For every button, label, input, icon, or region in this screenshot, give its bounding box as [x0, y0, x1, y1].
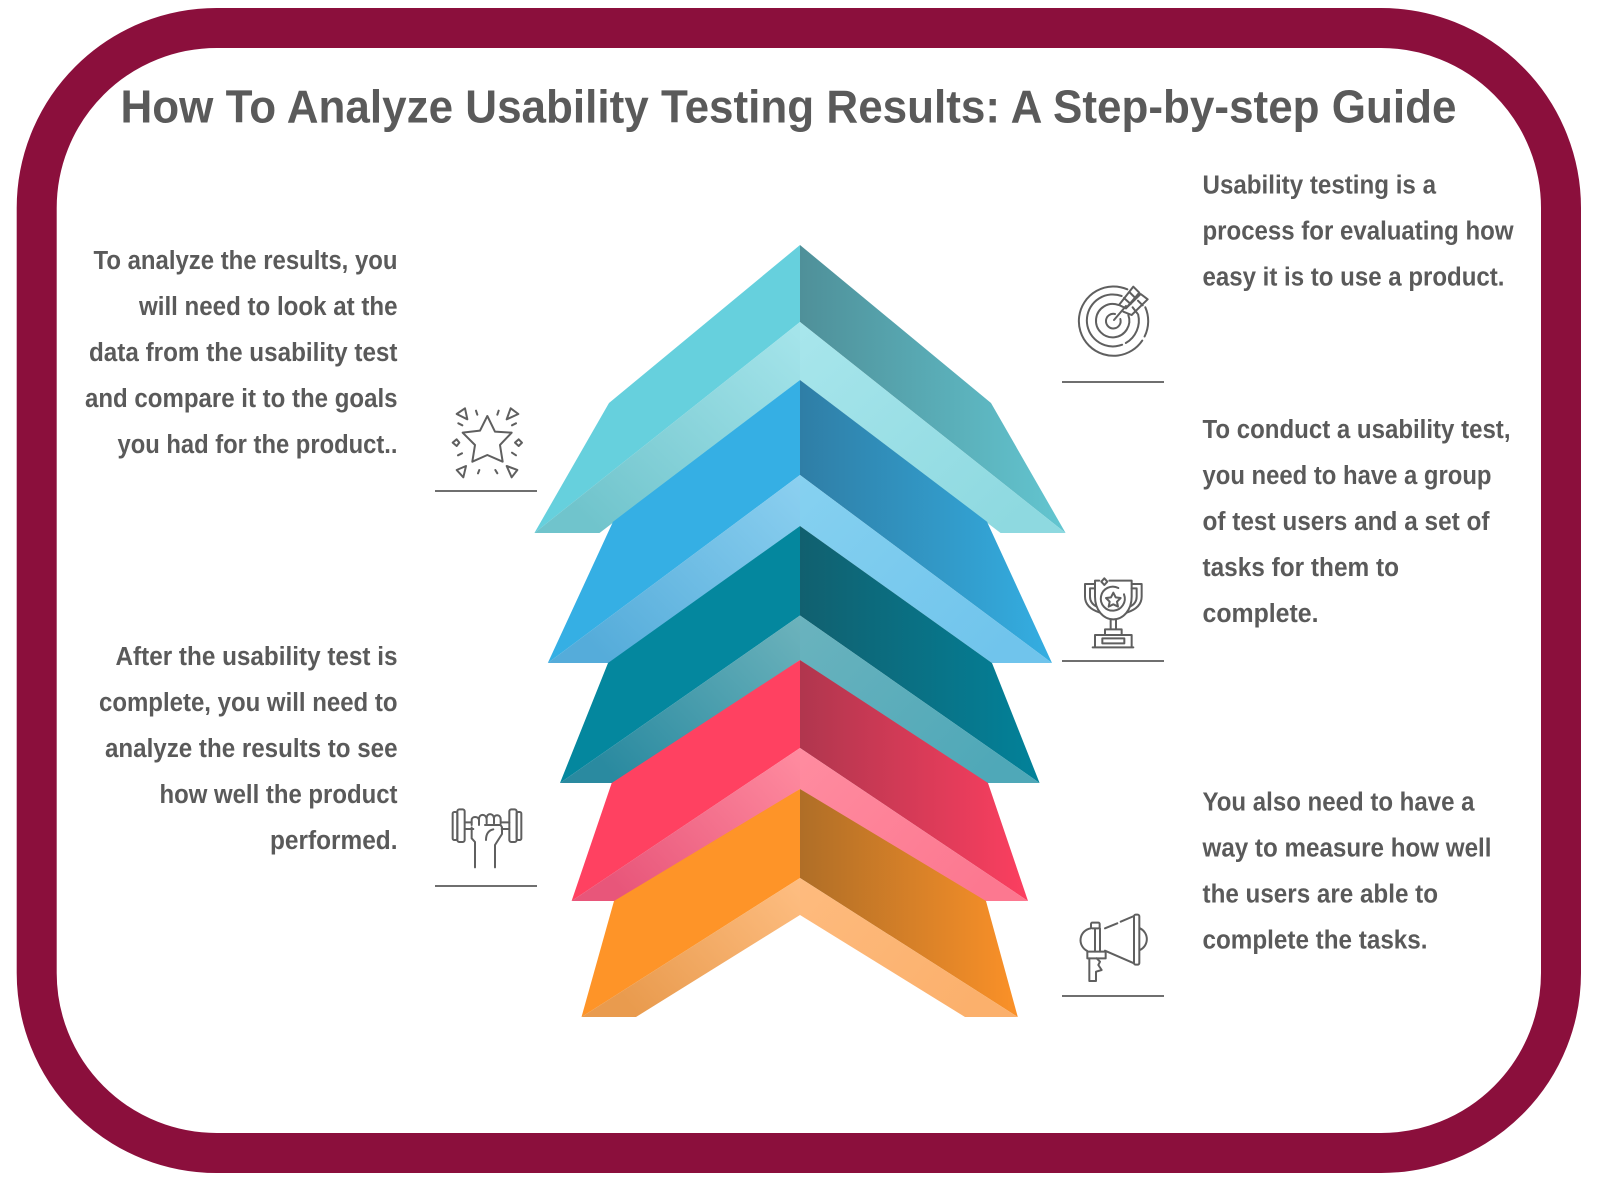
icon: target with arrow [1079, 286, 1148, 356]
text block: analyze the results: you had for the product.. [118, 431, 398, 459]
text block: after the usability test: complete, you will need to [99, 689, 398, 717]
chevron 4: red [572, 660, 1028, 901]
chevron 1: light teal [534, 245, 1066, 533]
text block: after the usability test: performed. [270, 827, 398, 855]
divider: megaphone [1062, 995, 1164, 997]
divider: trophy [1062, 660, 1164, 662]
text block: analyze the results: To analyze the results, you [94, 247, 398, 275]
icon: megaphone [1081, 915, 1147, 981]
text block: way to measure [1202, 788, 1492, 954]
text block: way to measure: You also need to have a [1202, 788, 1475, 816]
text block: way to measure: the users are able to [1202, 880, 1438, 908]
chevron 5: orange [582, 789, 1018, 1017]
text block: usability testing definition: Usability testing is a [1202, 172, 1437, 200]
text block: conduct a usability test: tasks for them to [1202, 554, 1399, 582]
chevron stack [534, 245, 1066, 1017]
text block: way to measure: complete the tasks. [1202, 926, 1428, 954]
text block: usability testing definition: process for evaluating how [1202, 218, 1514, 246]
text block: usability testing definition: easy it is to use a product. [1202, 264, 1504, 292]
text block: way to measure: way to measure how well [1202, 834, 1492, 862]
text block: conduct a usability test: complete. [1202, 600, 1318, 628]
icon: hand lifting dumbbell [453, 809, 521, 867]
chevron 2: blue [548, 380, 1052, 663]
text block: analyze the results [85, 247, 398, 459]
text block: analyze the results: will need to look at the [138, 293, 398, 321]
chevron 3: dark teal [560, 526, 1040, 783]
text block: after the usability test: analyze the results to see [105, 735, 398, 763]
text block: conduct a usability test: of test users and a set of [1202, 508, 1490, 536]
icon: trophy [1085, 578, 1142, 647]
text block: conduct a usability test [1202, 416, 1510, 628]
text block: after the usability test: how well the product [160, 781, 398, 809]
divider: dumbbell [435, 885, 537, 887]
title: How To Analyze Usability Testing Results: A Step-by-step Guide [120, 80, 1456, 132]
text block: after the usability test: After the usability test is [116, 643, 398, 671]
text block: usability testing definition [1202, 172, 1514, 292]
text block: after the usability test [99, 643, 398, 855]
icon: star with sparkles [453, 408, 522, 477]
text block: conduct a usability test: To conduct a usability test, [1202, 416, 1510, 444]
divider: star [435, 490, 537, 492]
text block: analyze the results: data from the usability test [89, 339, 398, 367]
text block: conduct a usability test: you need to have a group [1202, 462, 1492, 490]
divider: target [1062, 381, 1164, 383]
text block: analyze the results: and compare it to the goals [85, 385, 398, 413]
